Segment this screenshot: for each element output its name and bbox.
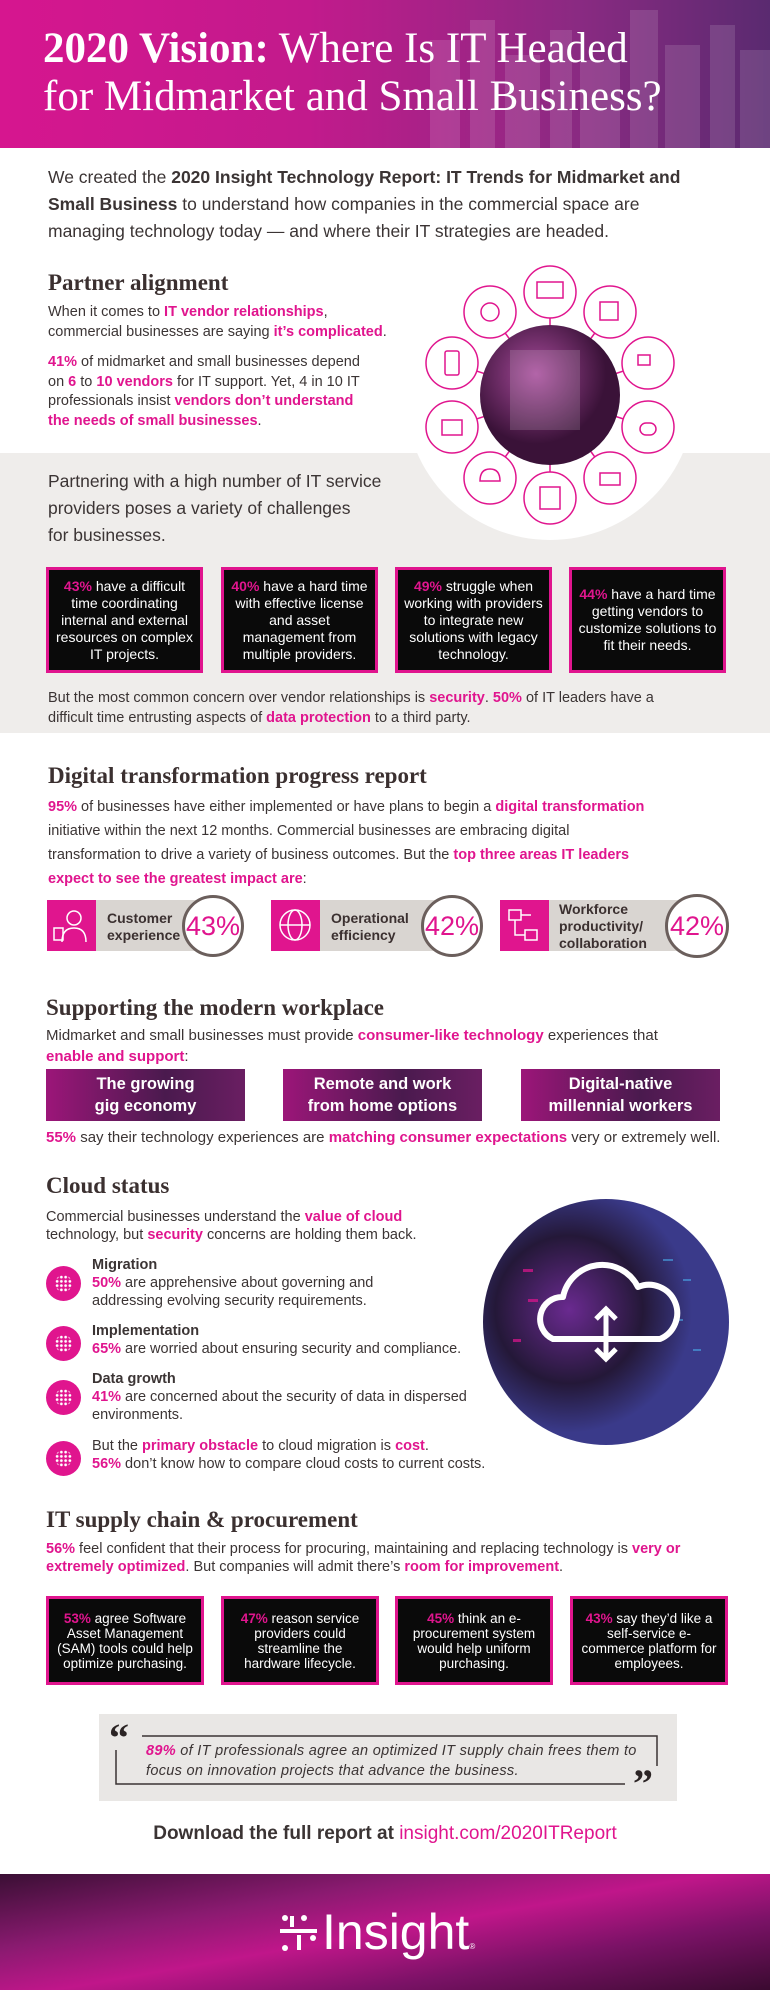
item: cost: But the primary obstacle to cloud migration is cost. [92,1438,429,1454]
download line: Download the full report at insight.com/2020ITReport [153,1823,617,1844]
box 43%: 43% have a difficult time coordinating internal and external resources on complex IT projects. [56,578,193,662]
bar: customer experience: Customer [107,910,172,926]
footer [0,1874,770,1990]
box 43% [570,1596,728,1685]
bar: customer experience: 43% [186,910,240,940]
cloud intro: Commercial businesses understand the value of cloud technology, but security concerns are holding them back. [46,1209,417,1243]
title: for Midmarket and Small Business? [43,73,662,120]
bar: operational efficiency: Operational [331,910,409,926]
partner stat text [48,354,360,428]
banner: millennial: millennial workers [548,1097,692,1115]
white circle behind icons [405,250,695,540]
box 40% [221,567,378,673]
bar: workforce productivity: productivity/ [559,918,643,934]
bar: operational efficiency [271,895,483,957]
partner stat text: the needs of small businesses. [48,412,262,428]
partner text: commercial businesses are saying it’s complicated. [48,324,387,340]
item: cost [46,1438,485,1476]
quote marks: “ [109,1715,129,1760]
box 43% [46,567,203,673]
digital text: initiative within the next 12 months. Commercial businesses are embracing digital [48,823,569,839]
banner: remote work: Remote and work [314,1075,451,1093]
partner text: When it comes to IT vendor relationships, [48,304,328,320]
digital text: transformation to drive a variety of business outcomes. But the top three areas IT leaders [48,847,629,863]
challenges intro [48,471,381,545]
box 44%: 44% have a hard time getting vendors to customize solutions to fit their needs. [579,586,716,653]
challenges intro: for businesses. [48,525,166,545]
box 53% [46,1596,204,1685]
digital text [48,799,644,887]
header banner [0,0,770,148]
55% text: 55% say their technology experiences are matching consumer expectations very or extremely well. [46,1129,720,1146]
banner: gig economy: gig economy [95,1097,196,1115]
heading: Digital transformation: Digital transformation progress report [48,763,427,788]
box 45%: 45% think an e-procurement system would help uniform purchasing. [413,1610,535,1670]
bar: workforce productivity: 42% [670,910,724,940]
supply text: 56% feel confident that their process for procuring, maintaining and replacing technology is very or extremely optimized. But companies will admit there’s room for improvement. [46,1541,680,1575]
partner stat text: on 6 to 10 vendors for IT support. Yet, 4 in 10 IT [48,374,360,390]
challenge boxes [46,567,726,673]
box 53%: 53% agree Software Asset Management (SAM) tools could help optimize purchasing. [57,1610,193,1670]
box 47%: 47% reason service providers could streamline the hardware lifecycle. [241,1610,359,1670]
item: implementation [46,1323,461,1361]
quote box: ” [633,1761,653,1806]
bar: operational efficiency: efficiency [331,927,396,943]
partner stat text: 41% of midmarket and small businesses depend [48,354,360,370]
bar: customer experience [47,895,244,957]
box 44% [569,567,726,673]
impact bars [47,894,729,958]
digital text: 95% of businesses have either implemented or have plans to begin a digital transformation [48,799,644,815]
item: implementation: Implementation [92,1323,199,1339]
item: data growth [46,1371,467,1423]
banner: gig economy: The growing [96,1075,195,1093]
bar: workforce productivity: Workforce [559,901,628,917]
item: migration: Migration [92,1257,157,1273]
banner: millennial: Digital-native [569,1075,672,1093]
bar: customer experience: experience [107,927,180,943]
title: 2020 Vision: Where Is IT Headed [43,25,628,72]
security text: But the most common concern over vendor relationships is security. 50% of IT leaders have a difficult time entrusting aspects of data protection to a third party. [48,690,654,726]
partner text [48,304,387,340]
bar: workforce productivity: collaboration [559,935,647,951]
heading: Partner alignment: Partner alignment [48,270,228,295]
box 47% [221,1596,379,1685]
item: migration [46,1257,373,1309]
supply boxes [46,1596,728,1685]
box 45% [395,1596,553,1685]
item: data growth: Data growth [92,1371,176,1387]
box 43%: 43% say they’d like a self-service e-commerce platform for employees. [581,1610,717,1670]
banner: gig economy [46,1069,245,1121]
challenges intro: providers poses a variety of challenges [48,498,351,518]
heading: Cloud status: Cloud status [46,1173,169,1198]
bar: operational efficiency: 42% [425,910,479,940]
digital text: expect to see the greatest impact are: [48,871,307,887]
quote box [99,1714,677,1801]
item: implementation: 65% are worried about ensuring security and compliance. [92,1341,461,1357]
quote text: 89% of IT professionals agree an optimized IT supply chain frees them to focus on innovation projects that advance the business. [146,1743,637,1778]
partner stat text: professionals insist vendors don’t understand [48,393,353,409]
icon ring graphic [425,265,675,525]
heading: IT supply chain: IT supply chain & procurement [46,1507,358,1532]
box 40%: 40% have a hard time with effective license and asset management from multiple providers. [231,578,368,662]
banner: remote work [283,1069,482,1121]
banner: remote work: from home options [308,1097,457,1115]
box 49%: 49% struggle when working with providers to integrate new solutions with legacy technology. [404,578,543,662]
item: migration: 50% are apprehensive about governing and addressing evolving security requirements. [92,1275,373,1309]
banner: millennial [521,1069,720,1121]
challenges intro: Partnering with a high number of IT service [48,471,381,491]
box 49% [395,567,552,673]
title [43,25,662,120]
cloud image [483,1199,729,1445]
bar: workforce productivity [500,894,729,958]
item: data growth: 41% are concerned about the security of data in dispersed environments. [92,1389,467,1423]
workplace text: Midmarket and small businesses must provide consumer-like technology experiences that enable and support: [46,1027,658,1065]
logo: Insight: Insight® [322,1904,475,1960]
heading: Supporting the modern workplace: Supporting the modern workplace [46,995,384,1020]
item: cost: 56% don’t know how to compare cloud costs to current costs. [92,1456,485,1472]
intro text: We created the 2020 Insight Technology Report: IT Trends for Midmarket and Small Business to understand how companies in the commercial space are managing technology today — and where their IT strategies are headed. [48,167,680,241]
gray band partner [0,453,770,733]
